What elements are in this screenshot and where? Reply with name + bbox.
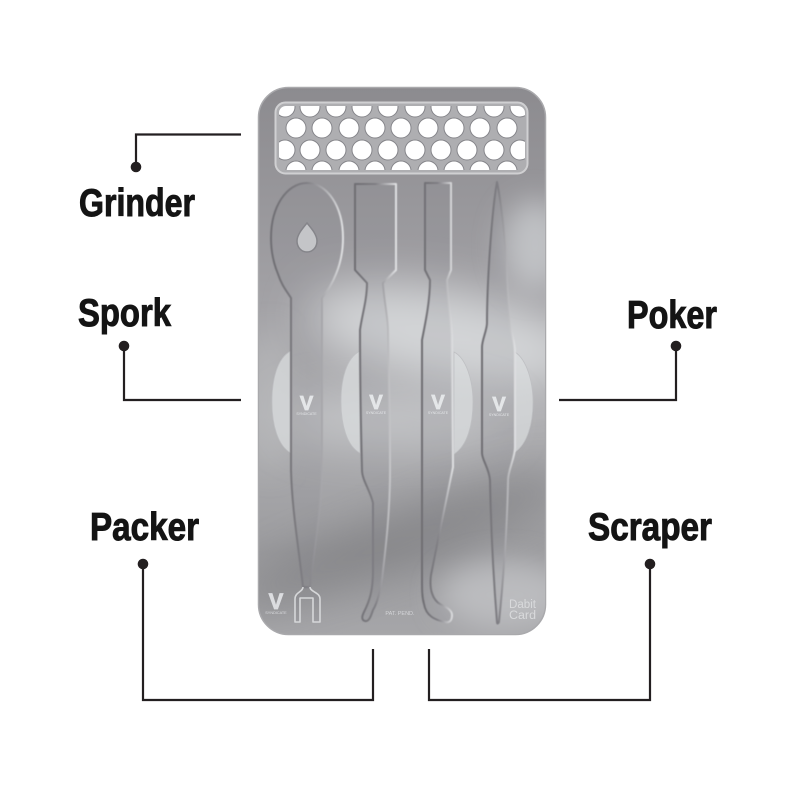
callout: packer: Packer bbox=[90, 506, 199, 549]
v logos: V bbox=[369, 392, 383, 414]
v logos: V bbox=[492, 394, 506, 416]
dabit card bbox=[258, 86, 546, 636]
callout: packer bbox=[90, 506, 373, 700]
v logos: SYNDICATE bbox=[489, 413, 510, 417]
callout: grinder bbox=[79, 134, 241, 225]
corner logo bbox=[265, 589, 287, 615]
callout: poker bbox=[559, 294, 717, 400]
finger patches bbox=[272, 351, 533, 454]
tool: spork bbox=[271, 183, 343, 622]
corner logo: SYNDICATE bbox=[265, 611, 287, 615]
tool: packer bbox=[355, 184, 396, 621]
callout: poker: Poker bbox=[627, 294, 717, 337]
tool: poker bbox=[482, 182, 515, 624]
spork fork bbox=[295, 587, 320, 622]
v logos: V bbox=[431, 392, 445, 414]
tool: scraper bbox=[422, 183, 453, 622]
spork hole bbox=[297, 223, 317, 252]
corner logo: V bbox=[269, 589, 284, 614]
dabit card wordmark: Card bbox=[509, 610, 536, 622]
v logos: SYNDICATE bbox=[366, 411, 387, 415]
grinder window bbox=[274, 102, 528, 174]
v logos bbox=[296, 392, 510, 417]
callout: scraper: Scraper bbox=[588, 506, 712, 549]
v logos: V bbox=[300, 393, 314, 415]
patent text: PAT. PEND. bbox=[385, 611, 415, 617]
card body bbox=[258, 88, 546, 634]
v logos: SYNDICATE bbox=[428, 411, 449, 415]
dabit card wordmark: Dabit bbox=[509, 599, 537, 611]
callout: scraper bbox=[429, 506, 712, 700]
callout: spork: Spork bbox=[78, 292, 171, 335]
dabit card wordmark bbox=[509, 599, 537, 622]
callout: spork bbox=[78, 292, 241, 400]
v logos: SYNDICATE bbox=[296, 412, 317, 416]
callout: grinder: Grinder bbox=[79, 182, 195, 225]
card sheen bbox=[259, 192, 545, 634]
